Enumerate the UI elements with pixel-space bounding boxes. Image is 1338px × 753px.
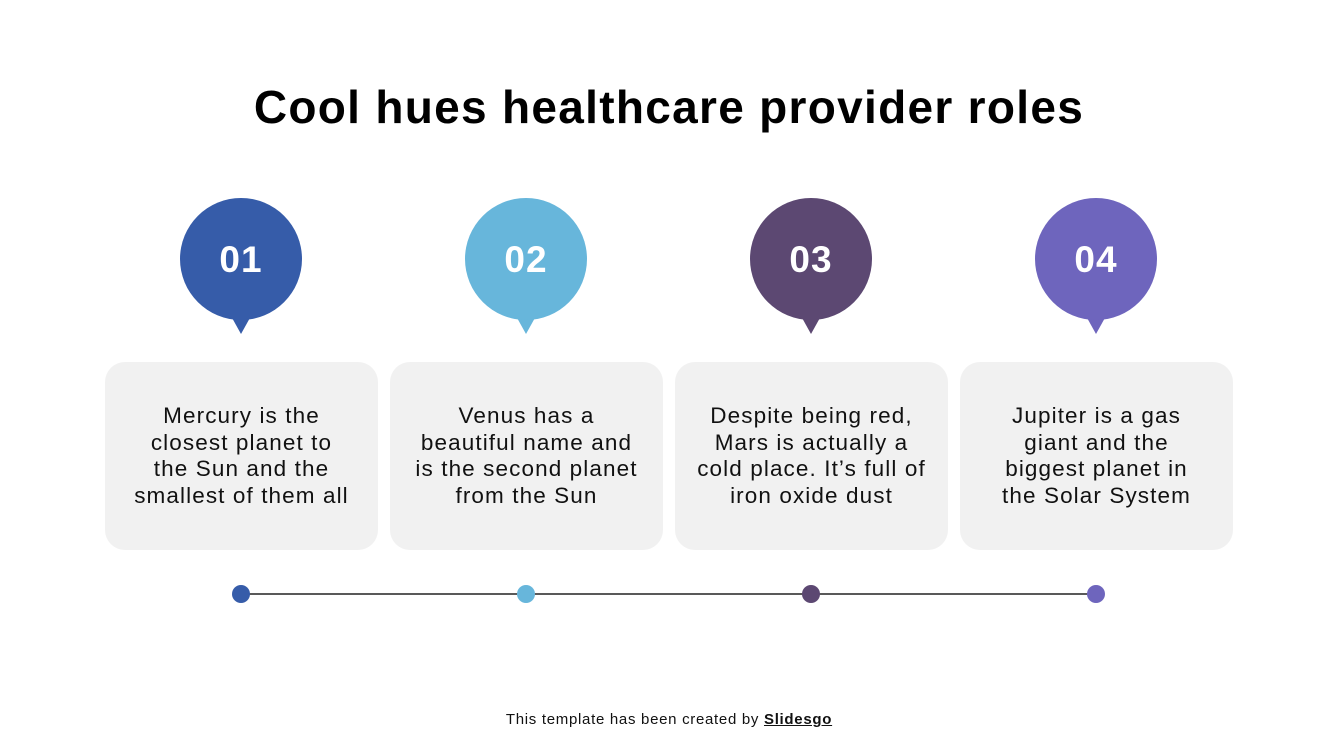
pin 04 — [1035, 198, 1157, 334]
card 02 — [390, 362, 663, 550]
pin 02 — [465, 198, 587, 334]
timeline — [232, 585, 1105, 603]
card 03: Despite being red, — [710, 403, 913, 428]
pin 01: 01 — [219, 239, 263, 280]
card 01: smallest of them all — [134, 482, 349, 508]
card 04: biggest planet in — [1005, 456, 1188, 481]
pin 03 — [750, 198, 872, 334]
card 01: the Sun and the — [154, 456, 329, 481]
title: Cool hues healthcare provider roles — [254, 81, 1084, 133]
card 03 — [675, 362, 948, 550]
card 04 — [960, 362, 1233, 550]
card 04: the Solar System — [1002, 482, 1191, 508]
card 01: Mercury is the — [163, 403, 320, 428]
card 03: cold place. It’s full of — [697, 456, 926, 481]
card 03: iron oxide dust — [730, 482, 893, 508]
pin 03: 03 — [789, 239, 833, 280]
card 02: Venus has a — [459, 403, 594, 428]
card 04: giant and the — [1024, 430, 1169, 454]
card 02: is the second planet — [415, 456, 638, 481]
card 04: Jupiter is a gas — [1012, 403, 1181, 428]
pin 02: 02 — [504, 239, 548, 280]
pin 04: 04 — [1074, 239, 1118, 280]
card 01 — [105, 362, 378, 550]
card 01: closest planet to — [151, 430, 332, 454]
footer: This template has been created by Slidesgo — [506, 711, 832, 728]
card 02: beautiful name and — [421, 430, 632, 454]
card 03: Mars is actually a — [715, 430, 908, 454]
card 02: from the Sun — [455, 482, 598, 508]
pin 01 — [180, 198, 302, 334]
